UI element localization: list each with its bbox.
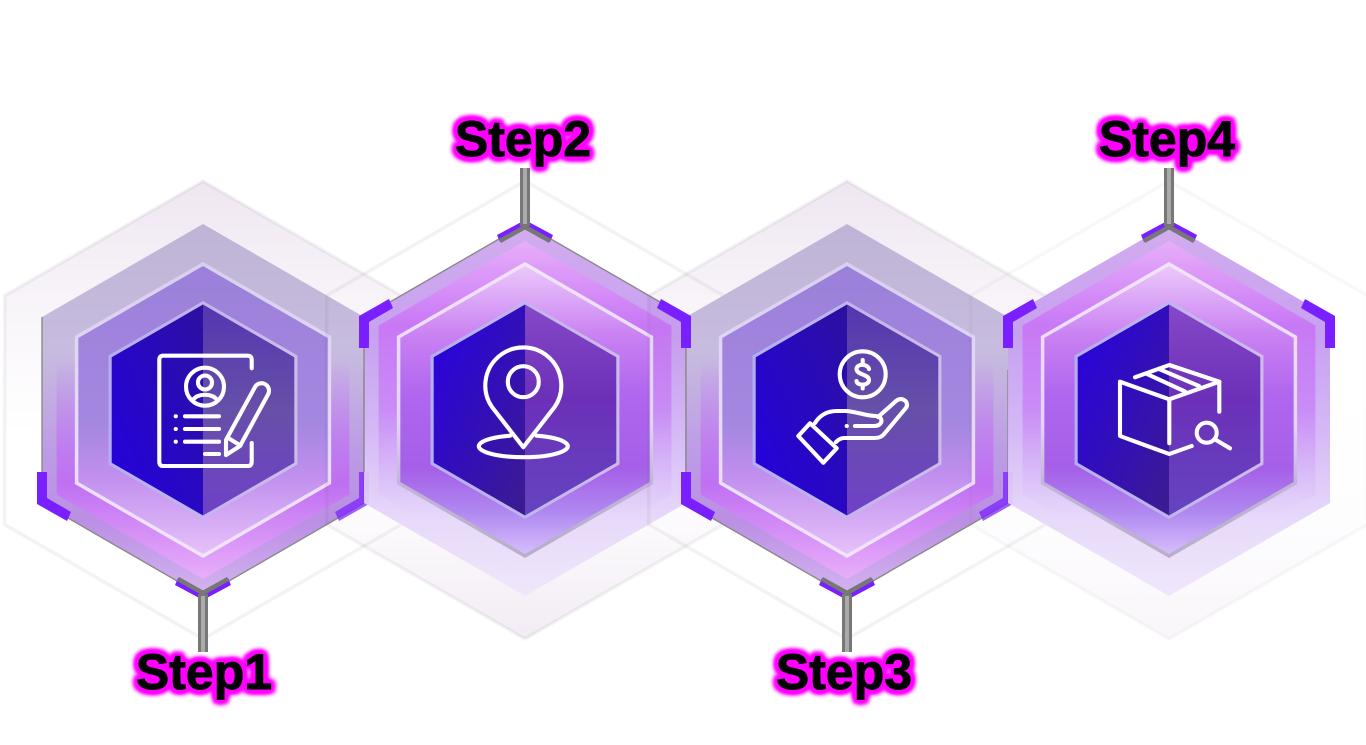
middle hexagon [1008, 224, 1330, 596]
hexagon 1 [5, 181, 401, 652]
icon: resume form with pencil [159, 356, 269, 466]
bracket: lower left [681, 472, 715, 521]
icon: hand holding coin [798, 351, 907, 463]
bracket: lower left [37, 472, 71, 521]
label: Step2: Step2 [455, 111, 591, 167]
hexagon 4 [971, 168, 1366, 639]
outlined hexagon [721, 264, 973, 556]
connector: bottom apex and stem [175, 578, 231, 652]
outer faint hexagon [649, 181, 1045, 639]
bracket: upper left [359, 299, 393, 348]
bracket: upper left [1003, 299, 1037, 348]
icon: location pin [479, 347, 568, 457]
inner core hexagon [1076, 303, 1262, 517]
inner core hexagon [110, 303, 296, 517]
middle hexagon [364, 224, 686, 596]
connector: bottom apex and stem [819, 578, 875, 652]
inner core hexagon [754, 303, 940, 517]
hexagon 2 [327, 168, 723, 639]
outer faint hexagon [327, 181, 723, 639]
connector: top apex and stem [1141, 168, 1197, 242]
icon: box with magnifier [1120, 365, 1230, 454]
outlined hexagon [77, 264, 329, 556]
outer faint hexagon [971, 181, 1366, 639]
hexagon 3 [649, 181, 1045, 652]
connector: top apex and stem [497, 168, 553, 242]
label: Step3: Step3 [776, 644, 912, 700]
magenta glow band [701, 241, 993, 579]
middle hexagon [42, 224, 364, 596]
bracket: lower right [335, 472, 369, 521]
bracket: lower right [979, 472, 1013, 521]
middle hexagon [686, 224, 1008, 596]
outlined hexagon [1043, 264, 1295, 556]
inner core hexagon [432, 303, 618, 517]
bracket: hexagon 2 upper right [657, 299, 691, 348]
outer faint hexagon [5, 181, 401, 639]
magenta glow band [1023, 241, 1315, 579]
label: Step1: Step1 [136, 644, 272, 700]
magenta glow band [57, 241, 349, 579]
outlined hexagon [399, 264, 651, 556]
bracket: upper right [1301, 299, 1335, 348]
label: Step4: Step4 [1099, 111, 1235, 167]
magenta glow band [379, 241, 671, 579]
